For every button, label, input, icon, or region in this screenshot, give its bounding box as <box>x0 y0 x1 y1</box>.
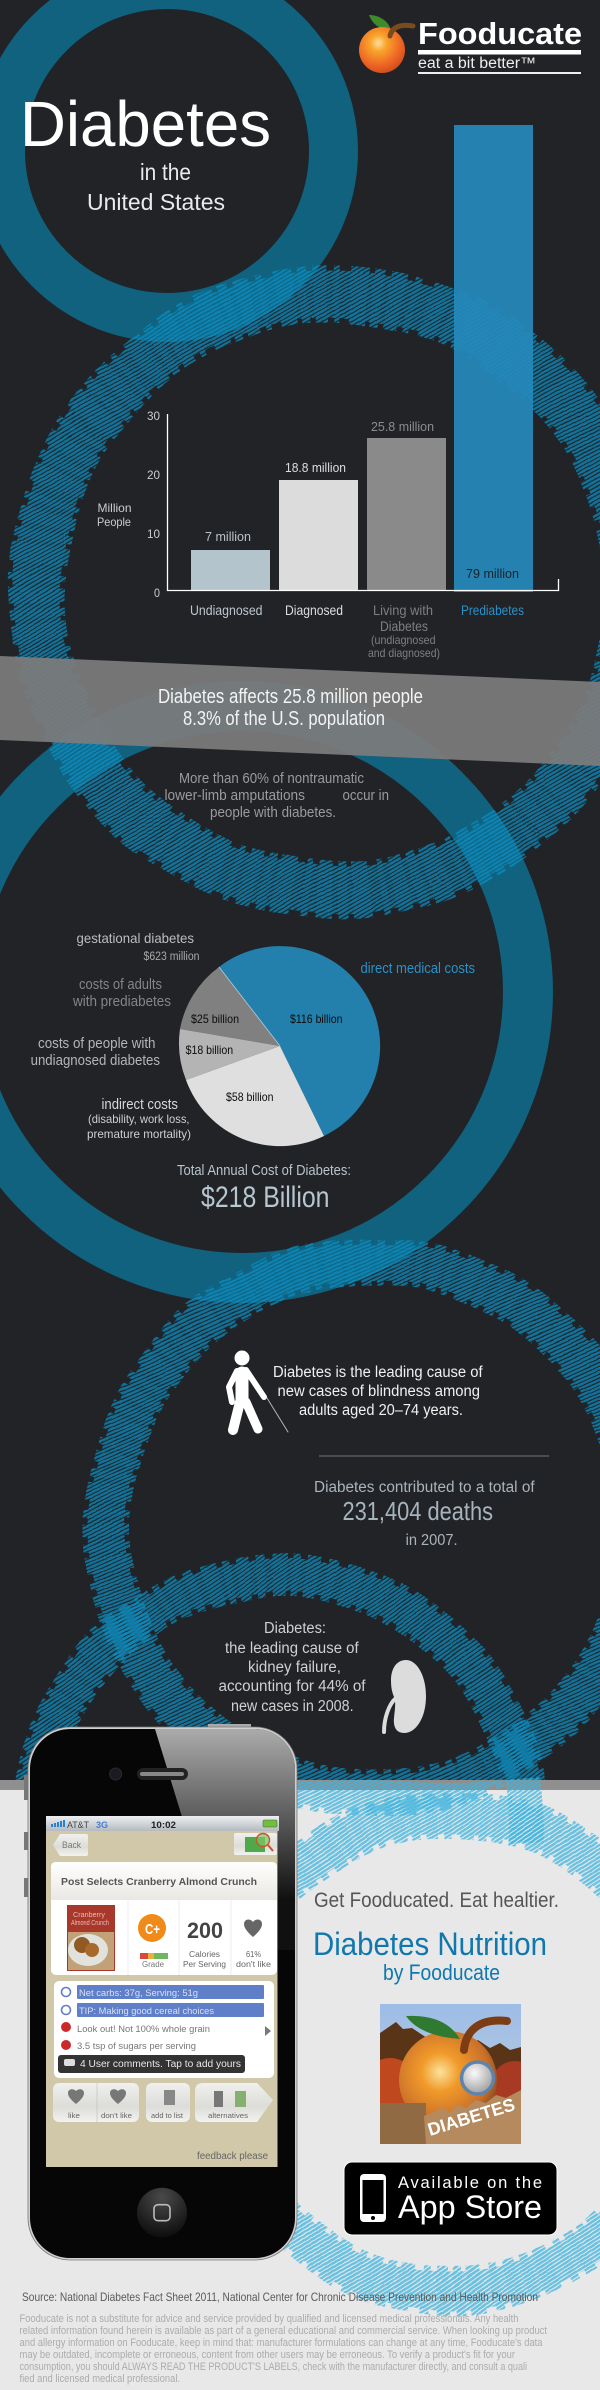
text: kidney failure <box>218 1620 366 1715</box>
promo text: Diabetes Nutrition <box>313 1926 547 1962</box>
slice: prediabetes <box>180 967 280 1046</box>
slice labels: $116 billion <box>290 1012 342 1026</box>
comments pill: 4 User comments. Tap to add yours <box>80 2059 241 2070</box>
y axis labels <box>147 409 160 600</box>
disclaimer: Fooducate is not a substitute for advice and service provided by qualified and licensed medical professionals. Any health <box>20 2313 518 2325</box>
logo: Fooducate <box>359 15 582 74</box>
text: amputations: lower-limb amputations <box>164 787 305 804</box>
text: amputations: More than 60% of nontraumatic <box>179 770 364 787</box>
value labels: 18.8 million <box>285 460 346 475</box>
text: deaths <box>314 1479 535 1549</box>
value labels: 7 million <box>205 529 251 544</box>
pie legend labels: (disability, work loss, <box>88 1112 190 1126</box>
tips card: 3.5 tsp of sugars per serving <box>77 2041 196 2051</box>
banner: 25.8 million people: Diabetes affects 25.8 million people <box>158 686 423 708</box>
icon: blind person with cane <box>229 1350 288 1432</box>
pie chart: cost of diabetes <box>179 946 380 1146</box>
bar: undiagnosed <box>191 550 270 591</box>
y axis title <box>97 501 132 529</box>
screen glare <box>155 1729 295 1950</box>
logo: Fooducate: eat a bit better™ <box>418 55 536 72</box>
dislike stat: don't like <box>236 1960 272 1969</box>
value labels <box>205 419 519 581</box>
status bar: 3G <box>96 1820 108 1830</box>
title: in the <box>140 159 191 185</box>
app store badge: Available on the <box>398 2174 542 2192</box>
calories: Calories <box>189 1950 220 1959</box>
app screen <box>46 1816 279 2167</box>
icon: orange <box>359 15 413 73</box>
status bar: AT&T <box>67 1820 89 1830</box>
slice labels <box>186 1012 342 1104</box>
category labels: Prediabetes <box>461 602 524 618</box>
tips card <box>54 1981 274 2078</box>
pie legend labels: gestational diabetes <box>76 930 194 946</box>
grade badge <box>138 1914 168 1969</box>
slice labels: $25 billion <box>191 1012 239 1026</box>
value labels: 25.8 million <box>371 419 434 434</box>
slice: direct medical costs <box>219 946 380 1136</box>
y axis labels: 20 <box>147 468 160 482</box>
calories: 200 <box>187 1918 223 1943</box>
category labels: and diagnosed) <box>368 646 440 660</box>
scribble ring: upper <box>37 294 600 890</box>
action buttons: add to list <box>151 2111 184 2120</box>
total annual cost: $218 Billion <box>201 1181 330 1214</box>
tips card: Look out! Not 100% whole grain <box>77 2024 210 2034</box>
scribble rings on dark <box>8 265 600 1780</box>
title: Diabetes <box>20 88 271 160</box>
category labels: Diabetes <box>380 618 428 634</box>
logo: Fooducate: Fooducate <box>418 16 582 51</box>
banner: 25.8 million people: 8.3% of the U.S. population <box>183 708 385 730</box>
text: kidney failure: the leading cause of <box>225 1640 359 1657</box>
y axis labels: 30 <box>147 409 160 423</box>
scribble ring: bottom <box>16 1553 545 1780</box>
text: deaths: Diabetes contributed to a total of <box>314 1479 535 1496</box>
bar chart: people with diabetes <box>97 125 558 660</box>
back button <box>53 1834 88 1856</box>
total annual cost: Total Annual Cost of Diabetes: <box>177 1162 351 1179</box>
scribble rings on light <box>282 1778 600 2316</box>
grade badge: Grade <box>142 1960 165 1969</box>
category labels: Undiagnosed <box>190 602 262 618</box>
category labels <box>190 602 524 660</box>
text: amputations: people with diabetes. <box>210 804 336 821</box>
home button <box>137 2188 187 2238</box>
tips card: Net carbs: 37g, Serving: 51g <box>79 1988 198 1998</box>
axes <box>168 414 558 590</box>
value labels: 79 million <box>466 566 519 581</box>
category labels: Diagnosed <box>285 602 343 618</box>
dislike stat: 61% <box>246 1950 261 1959</box>
text: deaths: in 2007. <box>406 1532 458 1549</box>
pie legend labels: $623 million <box>144 951 200 963</box>
cereal box <box>67 1905 115 1971</box>
slice: undiagnosed <box>179 1029 280 1080</box>
pie legend labels: undiagnosed diabetes <box>31 1053 160 1069</box>
title: United States <box>87 189 225 215</box>
text: blindness: new cases of blindness among <box>278 1383 480 1400</box>
speaker <box>137 1768 188 1780</box>
icon: phone <box>360 2174 386 2222</box>
pie legend labels: costs of adults <box>79 977 162 993</box>
phone <box>24 1724 297 2260</box>
grey strip <box>0 1780 600 1790</box>
y axis title: Million <box>98 501 132 515</box>
slice labels: $58 billion <box>226 1090 274 1104</box>
disclaimer: may be outdated, incomplete or erroneous, content from other users may be erroneous. To verify a product's fit for your <box>20 2349 515 2361</box>
phone side buttons <box>24 1724 251 1897</box>
cereal box: Almond Crunch <box>71 1920 109 1927</box>
disclaimer: fied and licensed medical professional. <box>20 2373 180 2385</box>
pie legend labels: direct medical costs <box>360 960 475 977</box>
promo text: by Fooducate <box>383 1960 500 1985</box>
pie legend labels: indirect costs <box>102 1097 178 1113</box>
scribble ring: bottom on light <box>506 1778 544 1844</box>
text: blindness: Diabetes is the leading cause of <box>273 1364 483 1381</box>
text: blindness <box>273 1364 483 1419</box>
y axis labels: 0 <box>154 586 160 600</box>
scribble ring: lower <box>107 1261 600 1793</box>
text: kidney failure: accounting for 44% of <box>218 1678 366 1695</box>
light background panel <box>0 1790 600 2390</box>
app store badge: App Store <box>398 2189 542 2225</box>
product card <box>51 1862 277 1975</box>
promo text: Get Fooducated. Eat healtier. <box>314 1889 559 1912</box>
app icon: Diabetes <box>380 2004 521 2144</box>
disclaimer <box>20 2313 547 2385</box>
text: amputations: occur in <box>342 787 389 804</box>
solid ring: top <box>0 0 334 318</box>
status bar <box>46 1816 279 1831</box>
status bar: 10:02 <box>151 1820 176 1831</box>
text: kidney failure: Diabetes: <box>264 1620 326 1637</box>
bar: living with diabetes <box>367 438 446 591</box>
calories: Per Serving <box>183 1960 226 1969</box>
y axis labels: 10 <box>147 527 160 541</box>
category labels: Living with <box>373 602 433 618</box>
phone body <box>28 1727 297 2260</box>
title <box>20 88 271 215</box>
slice labels: $18 billion <box>186 1043 233 1057</box>
text: kidney failure: new cases in 2008. <box>231 1698 354 1715</box>
comments pill <box>58 2055 245 2073</box>
scribble ring: right column <box>212 1814 600 2290</box>
action buttons: alternatives <box>208 2111 248 2120</box>
icon: kidney <box>384 1660 426 1733</box>
text: amputations <box>164 770 389 821</box>
product card: Post Selects Cranberry Almond Crunch <box>61 1876 257 1888</box>
action buttons <box>53 2083 273 2122</box>
scan button <box>234 1833 277 1855</box>
pie legend labels: with prediabetes <box>72 994 171 1010</box>
text: kidney failure: kidney failure, <box>248 1659 341 1676</box>
solid ring: middle <box>0 706 528 1278</box>
feedback link: feedback please <box>197 2151 268 2162</box>
back button: Back <box>62 1840 81 1850</box>
bar: diagnosed <box>279 480 358 591</box>
pie legend labels: costs of people with <box>38 1036 156 1052</box>
grade badge: C+ <box>145 1921 160 1938</box>
camera <box>110 1768 122 1780</box>
bar: prediabetes <box>454 125 533 592</box>
pie legend labels <box>31 930 475 1141</box>
total annual cost <box>177 1162 351 1214</box>
cereal box: Cranberry <box>73 1912 106 1919</box>
calories <box>183 1918 226 1969</box>
app store badge <box>344 2162 557 2235</box>
category labels: (undiagnosed <box>371 633 436 647</box>
banner: 25.8 million people <box>0 656 600 766</box>
y axis title: People <box>97 515 131 529</box>
app icon: Diabetes: DIABETES <box>425 2094 517 2140</box>
action buttons: like <box>68 2111 80 2120</box>
promo text <box>313 1889 559 1985</box>
text: blindness: adults aged 20–74 years. <box>299 1402 463 1419</box>
text: deaths: 231,404 deaths <box>342 1496 493 1526</box>
tips card: TIP: Making good cereal choices <box>79 2006 215 2016</box>
action buttons: don't like <box>101 2111 132 2120</box>
dark background <box>0 0 600 1790</box>
pie legend labels: premature mortality) <box>87 1127 191 1141</box>
dislike stat <box>236 1920 272 1969</box>
slice: indirect costs <box>186 1046 324 1146</box>
scribble ring: lower on light <box>297 1780 514 1816</box>
